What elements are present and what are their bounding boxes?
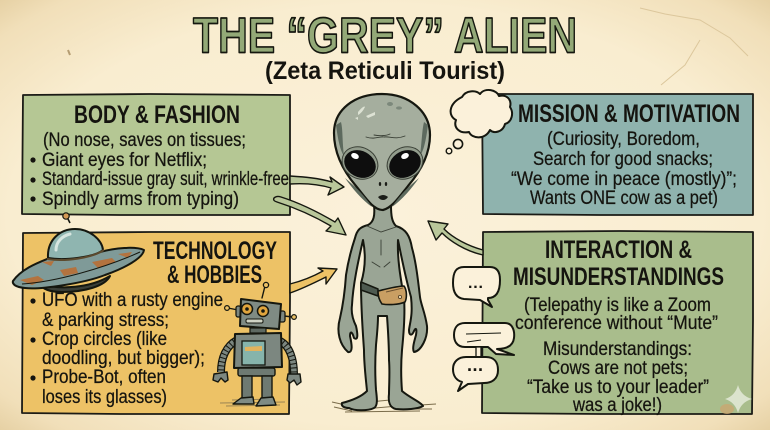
text: technology list xyxy=(30,290,223,408)
icon: probe robot xyxy=(213,282,301,406)
heading: technology and hobbies: TECHNOLOGY xyxy=(153,237,277,265)
antenna xyxy=(63,213,70,223)
text: interaction body: (Telepathy is like a Zoom xyxy=(524,295,711,316)
text: body and fashion list: Spindly arms from typing) xyxy=(42,189,239,210)
text: interaction body xyxy=(515,295,718,416)
text: body and fashion list: Giant eyes for Netflix; xyxy=(42,150,207,171)
head highlights xyxy=(355,107,375,120)
speech bubble connector xyxy=(476,347,481,357)
illustration: grey alien xyxy=(332,94,436,412)
ground shadow xyxy=(332,400,436,412)
arrow: body to alien lower xyxy=(274,196,346,235)
text: mission list: Search for good snacks; xyxy=(533,149,713,170)
speech bubble three: ... xyxy=(467,355,483,375)
alien chest lines xyxy=(367,226,396,267)
icon: sparkle and stain xyxy=(720,385,752,414)
alien body xyxy=(338,205,427,410)
heading: body and fashion: BODY & FASHION xyxy=(74,101,240,129)
head shading xyxy=(336,122,428,207)
text: body and fashion list: Standard-issue gray suit, wrinkle-free xyxy=(42,169,289,190)
robot ground hatch xyxy=(220,399,285,406)
text: interaction body: Misunderstandings: xyxy=(543,339,692,360)
robot legs xyxy=(233,376,276,406)
text: mission list: “We come in peace (mostly)”; xyxy=(511,169,737,190)
heading: technology and hobbies xyxy=(153,237,277,289)
arrow: technology to alien xyxy=(290,268,337,293)
icon: thought bubble xyxy=(446,90,512,154)
arrow: interaction to alien xyxy=(428,221,483,255)
subtitle: (Zeta Reticuli Tourist) xyxy=(265,57,505,85)
text: interaction body: conference without “Mute” xyxy=(515,313,718,334)
panel: technology and hobbies xyxy=(22,232,290,414)
text: technology list: Probe-Bot, often xyxy=(42,367,166,388)
panel: body and fashion xyxy=(22,94,290,215)
title: THE “GREY” ALIEN xyxy=(193,8,577,64)
alien nostrils xyxy=(379,182,387,186)
heading: interaction and misunderstandings xyxy=(513,236,724,291)
icon: UFO xyxy=(13,213,144,292)
alien mouth xyxy=(378,195,388,200)
heading: technology and hobbies: & HOBBIES xyxy=(167,261,262,289)
text: technology list: loses its glasses) xyxy=(42,387,167,408)
arrow: body to alien upper xyxy=(290,176,344,195)
robot screen xyxy=(242,341,265,365)
alien fanny pack xyxy=(361,282,406,305)
icon: speech bubbles xyxy=(453,267,514,391)
text: body and fashion list: (No nose, saves on tissues; xyxy=(43,130,246,151)
text: interaction body: “Take us to your leader” xyxy=(527,377,709,398)
panel: interaction and misunderstandings xyxy=(482,231,753,416)
text: technology list: Crop circles (like xyxy=(42,329,167,350)
panel: mission and motivation xyxy=(482,94,753,215)
text: technology list: doodling, but bigger); xyxy=(42,348,205,369)
brow lines xyxy=(366,134,405,138)
speech bubble one: ... xyxy=(468,275,483,292)
text: mission list xyxy=(511,129,737,209)
robot ears xyxy=(225,306,296,322)
alien eyes xyxy=(336,141,429,185)
text: technology list: UFO with a rusty engine xyxy=(42,290,223,311)
robot head antenna xyxy=(262,282,269,298)
text: mission list: (Curiosity, Boredom, xyxy=(547,129,700,150)
text: mission list: Wants ONE cow as a pet) xyxy=(530,188,718,209)
robot arms xyxy=(213,340,301,385)
text: interaction body: was a joke!) xyxy=(572,395,662,416)
heading: interaction and misunderstandings: INTERACTION & xyxy=(545,236,692,264)
speech bubble two xyxy=(454,323,514,355)
text: interaction body: Cows are not pets; xyxy=(548,358,688,379)
text: technology list: & parking stress; xyxy=(42,310,169,331)
text: body and fashion list xyxy=(30,130,289,210)
alien head xyxy=(334,94,430,210)
robot eyes xyxy=(242,304,268,316)
